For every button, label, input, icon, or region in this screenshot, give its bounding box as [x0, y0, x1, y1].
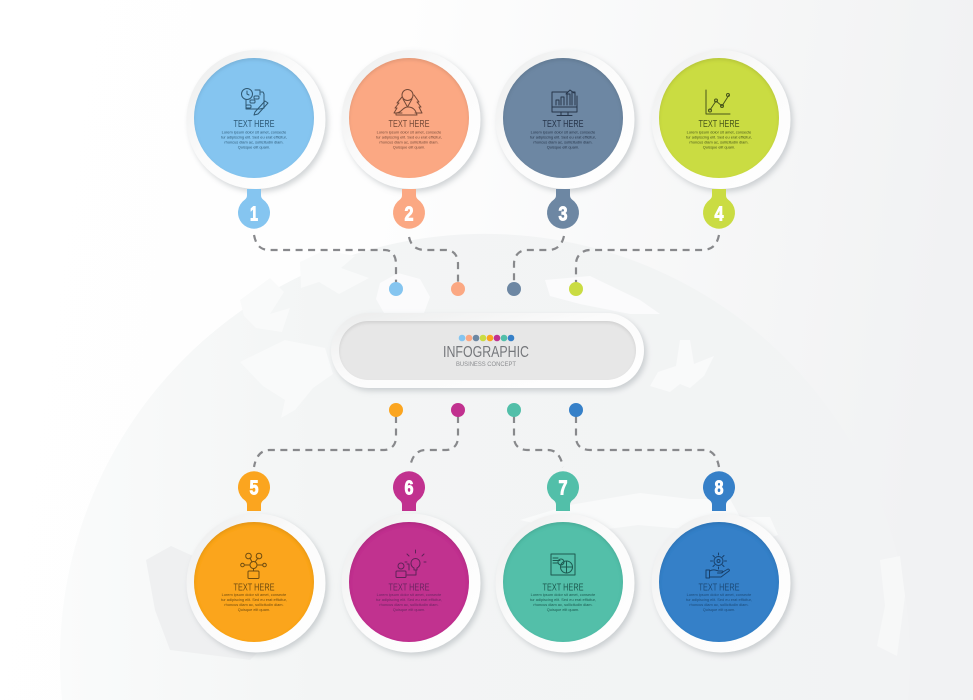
world globe backdrop [60, 234, 910, 700]
number pin 4: 4 [714, 204, 724, 226]
number pin 7: 7 [558, 478, 568, 500]
heading: TEXT HERE [234, 582, 274, 594]
center panel: infographic title [331, 313, 644, 388]
panel: step 2 [342, 50, 480, 229]
connector: step 7 to teal dot [514, 416, 563, 467]
number pin 5: 5 [250, 478, 258, 500]
body text: tur adipiscing elit. Sed eu erat efficitur, [530, 134, 596, 140]
body text [376, 130, 442, 150]
body text: rhoncus diam ac, sollicitudin diam. [224, 602, 284, 607]
panel: step 3 [496, 50, 634, 229]
connector: step 6 to magenta dot [410, 416, 458, 467]
heading: TEXT HERE [234, 118, 274, 130]
body text [530, 592, 596, 612]
body text: Lorem ipsum dolor sit amet, consecte [222, 130, 286, 134]
body text: tur adipiscing elit. Sed eu erat efficitur, [686, 134, 752, 140]
body text: rhoncus diam ac, sollicitudin diam. [379, 140, 439, 144]
number pin 1 [238, 189, 270, 229]
heading: TEXT HERE [542, 118, 584, 130]
body text: tur adipiscing elit. Sed eu erat efficitur, [376, 134, 442, 140]
body text [686, 130, 752, 150]
connector: step 8 to blue dot [576, 416, 719, 467]
number pin 5 [238, 471, 270, 511]
connector: step 3 to slate dot [514, 236, 564, 284]
panel: step 4 [652, 50, 790, 229]
body text: rhoncus diam ac, sollicitudin diam. [689, 602, 749, 607]
heading: INFOGRAPHIC [443, 344, 529, 361]
body text: Lorem ipsum dolor sit amet, consecte [531, 592, 595, 597]
panel: step 7 [496, 471, 634, 652]
icon: location and landscape [394, 90, 422, 115]
body text: tur adipiscing elit. Sed eu erat efficitur, [221, 597, 287, 602]
body text: Quisque elit quam. [547, 144, 579, 150]
connector: step 4 to green dot [576, 235, 719, 284]
panel: step 6 [342, 471, 480, 652]
body text: tur adipiscing elit. Sed eu erat efficitur, [530, 597, 596, 602]
number pin 3: 3 [558, 204, 568, 226]
icon: hand holding gear [706, 553, 729, 578]
icon: network nodes [241, 553, 266, 578]
heading: TEXT HERE [542, 582, 584, 594]
icon: monitor with bar chart [552, 90, 577, 116]
heading: TEXT HERE [388, 582, 430, 594]
heading: TEXT HERE [698, 118, 740, 130]
number pin 8: 8 [714, 478, 724, 500]
body text: Lorem ipsum dolor sit amet, consecte [377, 130, 441, 134]
number pin 2: 2 [404, 204, 414, 226]
body text: Lorem ipsum dolor sit amet, consecte [222, 592, 286, 597]
number pin 6 [393, 471, 425, 511]
body text: rhoncus diam ac, sollicitudin diam. [224, 140, 284, 144]
subheading: BUSINESS CONCEPT [456, 361, 516, 368]
body text: Quisque elit quam. [703, 144, 735, 150]
number pin 7 [547, 471, 579, 511]
body text [221, 592, 287, 612]
body text: Quisque elit quam. [238, 607, 270, 612]
body text: rhoncus diam ac, sollicitudin diam. [533, 140, 593, 144]
body text: Lorem ipsum dolor sit amet, consecte [377, 592, 441, 597]
body text: rhoncus diam ac, sollicitudin diam. [379, 602, 439, 607]
body text: Quisque elit quam. [547, 607, 579, 612]
color dots row [459, 335, 514, 341]
panel: step 1 [186, 50, 326, 229]
body text: rhoncus diam ac, sollicitudin diam. [689, 140, 749, 144]
body text: Quisque elit quam. [393, 607, 425, 612]
body text: Quisque elit quam. [703, 607, 735, 612]
dots row: lower [389, 403, 583, 417]
body text: Lorem ipsum dolor sit amet, consecte [687, 130, 751, 134]
body text: tur adipiscing elit. Sed eu erat efficitur, [686, 597, 752, 602]
dots row: upper [389, 282, 583, 296]
number pin 4 [703, 189, 735, 229]
body text: Quisque elit quam. [393, 144, 425, 150]
number pin 3 [547, 189, 579, 229]
number pin 6: 6 [404, 478, 414, 500]
number pin 2 [393, 189, 425, 229]
panel: step 5 [186, 471, 326, 652]
body text: Lorem ipsum dolor sit amet, consecte [531, 130, 595, 134]
body text [530, 130, 596, 150]
number pin 8 [703, 471, 735, 511]
body text: Lorem ipsum dolor sit amet, consecte [687, 592, 751, 597]
heading: TEXT HERE [388, 118, 430, 130]
body text: rhoncus diam ac, sollicitudin diam. [533, 602, 593, 607]
icon: planning checklist [242, 88, 268, 115]
icon: line graph [706, 90, 730, 114]
icon: person with light bulb [396, 550, 426, 578]
body text: tur adipiscing elit. Sed eu erat efficitur, [376, 597, 442, 602]
number pin 1: 1 [250, 204, 258, 226]
body text [686, 592, 752, 612]
body text: Quisque elit quam. [238, 144, 270, 150]
body text [376, 592, 442, 612]
heading: TEXT HERE [698, 582, 740, 594]
connector: step 1 to blue dot [254, 235, 396, 284]
connector: step 5 to amber dot [254, 416, 396, 467]
icon: dashboard with pie chart [551, 554, 575, 575]
panel: step 8 [652, 471, 790, 652]
body text [221, 130, 287, 150]
body text: tur adipiscing elit. Sed eu erat efficitur, [221, 134, 287, 140]
connector: step 2 to orange dot [409, 237, 458, 284]
